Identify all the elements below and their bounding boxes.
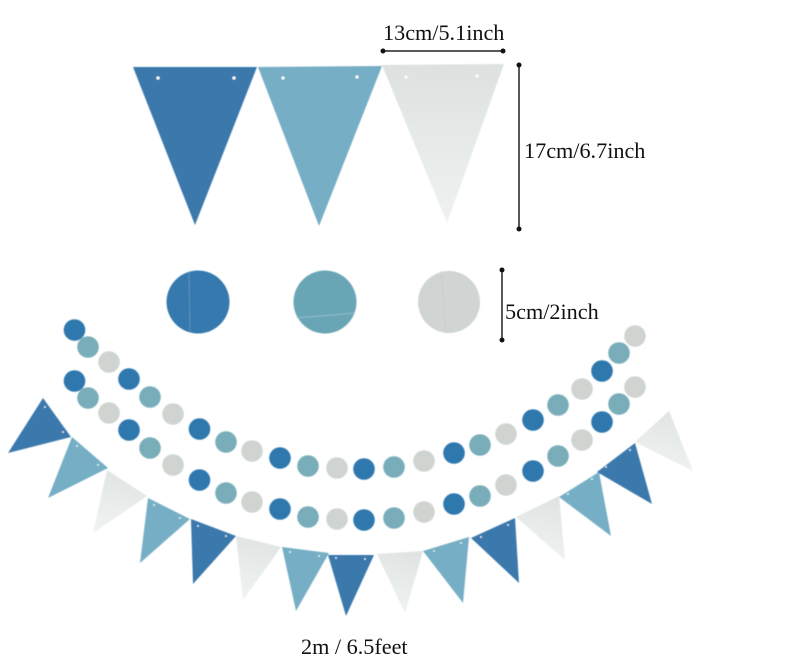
dimension: pennant height xyxy=(516,62,522,232)
large pennants xyxy=(133,64,504,226)
label: pennant height: 17cm/6.7inch xyxy=(524,138,645,163)
circle: silver glitter xyxy=(418,271,480,333)
label: circle diameter: 5cm/2inch xyxy=(505,299,599,324)
dimension: pennant width xyxy=(380,48,506,54)
pennant: light blue xyxy=(258,66,382,226)
circle garland: lower strand xyxy=(64,370,646,531)
pennant: dark blue xyxy=(133,67,257,225)
dimension: circle diameter xyxy=(500,268,504,342)
pennant garland xyxy=(8,398,693,616)
large circles xyxy=(166,270,480,334)
circle: teal xyxy=(294,270,356,334)
circle: dark blue xyxy=(166,270,230,334)
pennant: silver glitter xyxy=(382,64,504,223)
circle garland: upper strand xyxy=(64,319,646,480)
label: pennant width: 13cm/5.1inch xyxy=(383,20,504,45)
label: garland length: 2m / 6.5feet xyxy=(301,634,408,659)
